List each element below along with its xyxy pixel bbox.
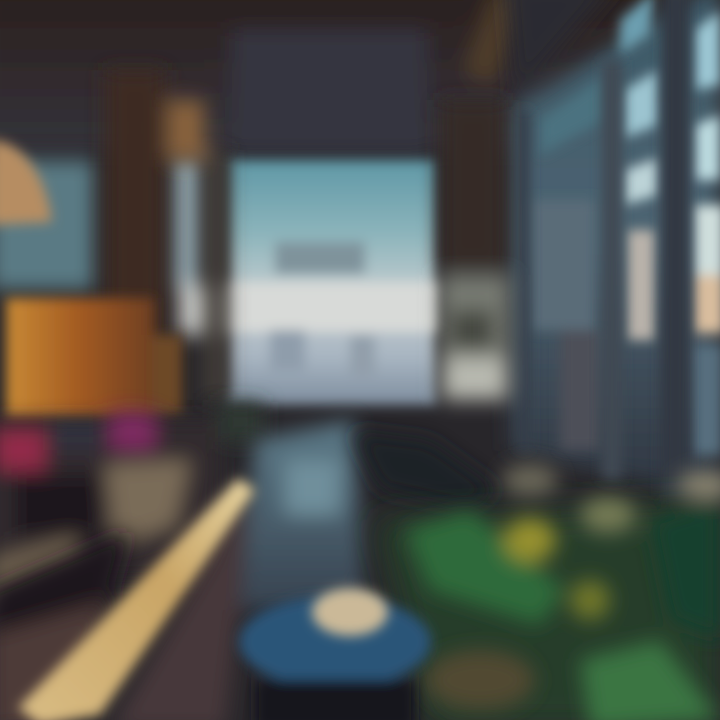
round blue table [239, 588, 431, 720]
columns [105, 70, 510, 410]
dark foreground furniture [350, 430, 500, 510]
right window wall [505, 0, 720, 500]
floor [0, 420, 365, 720]
left distant window [0, 155, 228, 335]
window mullions [518, 0, 690, 500]
plant foliage [375, 464, 720, 720]
table centrepiece [312, 588, 388, 636]
illuminated counter edge [18, 478, 255, 720]
central window with skyline [225, 160, 440, 405]
pendant lamp [0, 140, 52, 225]
lounge seating [0, 402, 263, 605]
orange wall panel [6, 298, 182, 418]
ceiling [0, 0, 720, 155]
bright window panes [530, 0, 720, 455]
